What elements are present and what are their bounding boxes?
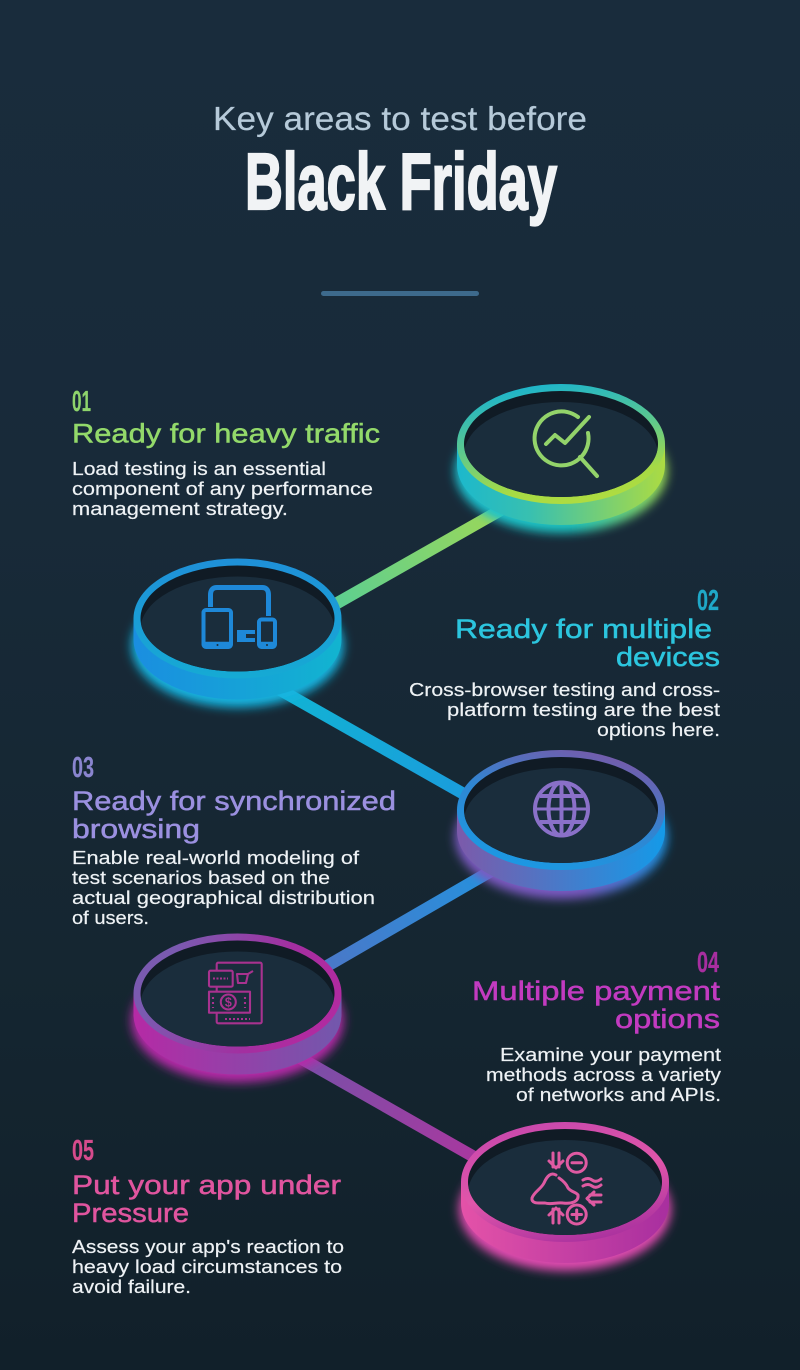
title block [213, 100, 587, 226]
disk 2 [132, 558, 344, 708]
heading 2: Ready for multiple [455, 614, 712, 644]
body 2: platform testing are the best [447, 699, 720, 720]
body 3: actual geographical distribution [72, 887, 375, 908]
number 03: 03 [72, 752, 94, 784]
disk 1 [455, 384, 667, 533]
number 05: 05 [72, 1135, 94, 1167]
body 2: options here. [597, 719, 720, 740]
number 01: 01 [72, 386, 91, 418]
text block: item 1 [72, 386, 380, 519]
text block: item 2 [409, 585, 720, 740]
text block: item 5 [72, 1135, 344, 1297]
body 4 [486, 1044, 722, 1105]
heading 4: Multiple payment [472, 976, 721, 1006]
connector: 3 to 4 [315, 863, 505, 973]
body 1: management strategy. [72, 498, 288, 519]
body 1: Load testing is an essential [72, 458, 326, 479]
disk 4 [132, 934, 344, 1082]
text block: item 4 [472, 947, 722, 1105]
body 5: heavy load circumstances to [72, 1256, 342, 1277]
body 5: avoid failure. [72, 1276, 191, 1297]
body 4: Examine your payment [500, 1044, 721, 1065]
heading 3: browsing [72, 814, 200, 844]
heading 4: options [615, 1004, 720, 1034]
icon: payment tablet: $ [225, 996, 232, 1010]
body 2: Cross-browser testing and cross- [409, 679, 720, 700]
body 4: methods across a variety [486, 1064, 722, 1085]
body 5: Assess your app's reaction to [72, 1236, 344, 1257]
text block: item 3 [72, 752, 396, 928]
body 5 [72, 1236, 344, 1297]
body 3: test scenarios based on the [72, 867, 330, 888]
disk 5 [459, 1122, 671, 1271]
icon: payment tablet [209, 963, 262, 1023]
body 3: Enable real-world modeling of [72, 847, 360, 868]
icon: globe [535, 782, 588, 836]
heading 5: Pressure [72, 1198, 189, 1228]
connector: 2 to 3 [275, 687, 485, 806]
heading 5: Put your app under [72, 1170, 341, 1200]
icon: magnifier with trend line [535, 411, 597, 476]
icon: responsive devices [203, 588, 276, 647]
heading 1: Ready for heavy traffic [72, 418, 380, 448]
heading 3: Ready for synchronized [72, 786, 396, 816]
body 3: of users. [72, 907, 149, 928]
heading 2 [455, 614, 720, 672]
main title: Black Friday [245, 137, 557, 226]
heading 3 [72, 786, 396, 844]
icon: cloud under pressure [532, 1153, 601, 1224]
number 02: 02 [697, 585, 719, 617]
number 04: 04 [697, 947, 719, 979]
subtitle: Key areas to test before [213, 100, 587, 137]
title divider bar [321, 291, 479, 296]
connector: 1 to 2 [325, 502, 515, 610]
body 4: of networks and APIs. [516, 1084, 721, 1105]
body 1 [72, 458, 373, 519]
disk 3 [455, 750, 667, 899]
heading 4 [472, 976, 721, 1034]
body 1: component of any performance [72, 478, 373, 499]
heading 2: devices [616, 642, 720, 672]
heading 5 [72, 1170, 341, 1228]
body 2 [409, 679, 720, 740]
body 3 [72, 847, 375, 928]
connector: 4 to 5 [295, 1055, 490, 1166]
